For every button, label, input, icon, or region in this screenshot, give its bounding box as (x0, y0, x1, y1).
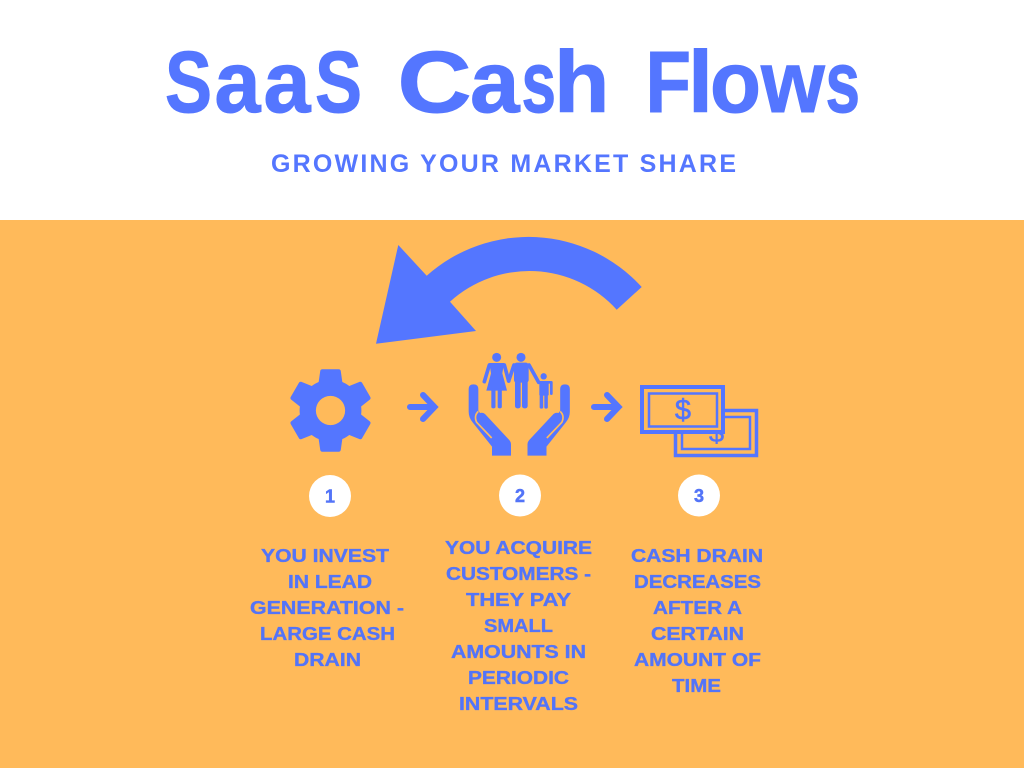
text: step 1 description: DRAIN (294, 649, 361, 670)
icon: family in hands (469, 353, 570, 456)
panel: header background (0, 0, 1024, 220)
text: step 3 description: AMOUNT OF (634, 649, 761, 670)
text: step 2 description (445, 537, 592, 714)
icon part: right hand (527, 384, 570, 456)
text: step 1 description: GENERATION - (250, 597, 404, 618)
text: step 2 description: PERIODIC (468, 667, 569, 688)
text: step 1 description: LARGE CASH (260, 623, 395, 644)
arrow: step 1 to step 2 (410, 395, 434, 419)
title: a (214, 34, 261, 131)
icon part: man (509, 353, 539, 408)
subtitle: GROWING YOUR MARKET SHARE (271, 150, 736, 178)
title: s (522, 34, 556, 131)
text: step 3 description: DECREASES (634, 571, 761, 592)
panel: orange background (0, 220, 1024, 768)
text: step 3 description (631, 545, 763, 696)
text: step 3 description: CASH DRAIN (631, 545, 763, 566)
title: o (710, 34, 761, 131)
icon part: woman (484, 353, 509, 408)
text: step 3 description: TIME (672, 675, 721, 696)
step 3 number badge: 3 (694, 486, 704, 506)
text: step 2 description: YOU ACQUIRE (445, 537, 592, 558)
icon part: back banknote: $ (709, 418, 724, 448)
text: step 1 description: IN LEAD (288, 571, 372, 592)
icon: gear (290, 369, 371, 452)
title: l (688, 34, 713, 131)
text: step 1 description (250, 545, 404, 670)
title: h (554, 34, 610, 131)
step 2 number badge: 2 (515, 486, 525, 506)
icon: banknotes (642, 387, 756, 456)
text: step 1 description: YOU INVEST (261, 545, 390, 566)
text: step 3 description: CERTAIN (651, 623, 744, 644)
step 3 number badge (678, 474, 720, 516)
title: a (264, 34, 311, 131)
icon part: left hand (469, 384, 511, 456)
text: step 2 description: THEY PAY (466, 589, 572, 610)
title: C (398, 34, 472, 131)
text: step 2 description: INTERVALS (459, 693, 578, 714)
text: step 2 description: AMOUNTS IN (451, 641, 586, 662)
title (165, 34, 860, 131)
step 1 number badge: 1 (325, 486, 335, 506)
text: step 3 description: AFTER A (653, 597, 742, 618)
title: w (760, 34, 825, 131)
text: step 2 description: SMALL (484, 615, 553, 636)
text: step 2 description: CUSTOMERS - (446, 563, 591, 584)
step 2 number badge (499, 474, 541, 516)
icon part: front banknote: $ (675, 394, 691, 426)
arrow: large curved return arrow (376, 237, 642, 344)
title: S (315, 34, 362, 131)
title: s (826, 34, 860, 131)
icon part: child (539, 373, 551, 409)
step 1 number badge (309, 475, 351, 517)
arrow: step 2 to step 3 (594, 395, 618, 419)
title: a (470, 34, 520, 131)
title: S (165, 34, 212, 131)
title: F (646, 34, 691, 131)
